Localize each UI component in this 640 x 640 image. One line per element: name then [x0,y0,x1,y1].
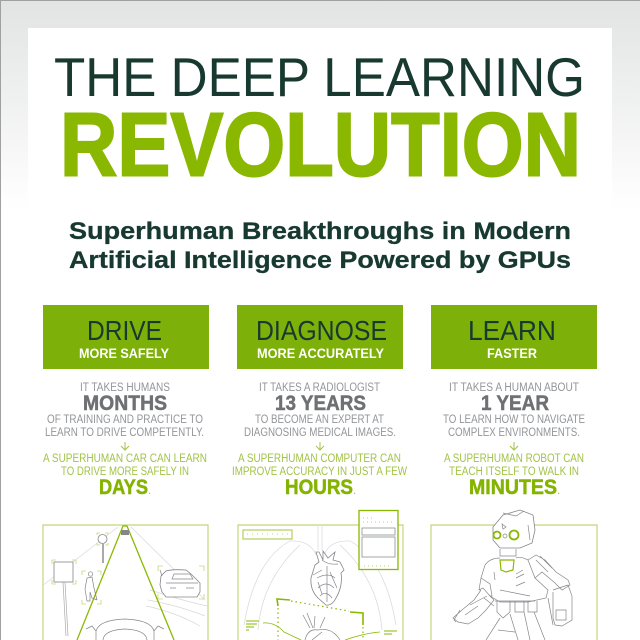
text: superhuman robot takes minutes: MINUTES [469,476,557,499]
robot right arm [528,555,572,626]
text: human takes 1 year: COMPLEX ENVIRONMENTS. [448,427,580,439]
car right [158,566,204,599]
callout left [246,621,259,630]
text: radiologist takes 13 years: DIAGNOSING MEDICAL IMAGES. [244,427,396,439]
illustration: self-driving car view [42,525,208,640]
heading: drive more safely: MORE SAFELY [79,345,170,361]
heading: learn faster: FASTER [487,345,537,361]
vision cone [77,526,174,640]
robot torso [481,557,548,602]
text: human takes 1 year [443,382,585,439]
text: human takes 1 year: TO LEARN HOW TO NAVIGATE [443,414,585,426]
text: superhuman computer takes hours: IMPROVE ACCURACY IN JUST A FEW [232,466,407,478]
text: superhuman robot takes minutes: TEACH ITSELF TO WALK IN [449,466,579,478]
text: humans take months: MONTHS [83,392,167,415]
small label box [243,530,292,539]
heading: drive more safely [43,305,209,369]
subtitle [69,218,571,274]
text: radiologist takes 13 years: 13 YEARS [275,392,366,415]
robot head [493,510,535,556]
robot chest badge [500,560,514,572]
text: humans take months [45,382,204,439]
text: superhuman robot takes minutes [444,453,584,499]
text: radiologist takes 13 years: TO BECOME AN EXPERT AT [255,414,384,426]
arrow: down [316,442,324,450]
text: humans take months: LEARN TO DRIVE COMPETENTLY. [45,427,204,439]
illustration: heart scan [238,510,403,640]
text: superhuman car takes days: A SUPERHUMAN CAR CAN LEARN [43,453,207,465]
lungs [244,525,396,630]
panel: learn [431,305,597,640]
text: humans take months: IT TAKES HUMANS [80,382,170,394]
text: humans take months: OF TRAINING AND PRACTICE TO [47,414,203,426]
round sign [97,533,108,563]
panel: diagnose [232,305,407,640]
road sign left [52,560,76,636]
heading: drive more safely: DRIVE [87,315,162,346]
title line: the deep learning: THE DEEP LEARNING [54,46,585,108]
heading: diagnose more accurately [237,305,403,369]
arrow: down [510,442,518,450]
heading: learn faster [431,305,597,369]
text: superhuman robot takes minutes: . [557,485,560,497]
illustration: robot [431,510,597,640]
text: radiologist takes 13 years [244,382,396,439]
title line: revolution: REVOLUTION [60,96,581,196]
camera [121,530,129,535]
heart detail [313,560,338,602]
scan bracket [277,599,363,640]
text: human takes 1 year: 1 YEAR [481,392,549,415]
text: superhuman computer takes hours: HOURS [285,476,353,499]
heading: diagnose more accurately: DIAGNOSE [256,315,387,346]
arrow: down [121,442,129,450]
heart lower [303,613,340,640]
robot hips and legs [486,598,553,640]
text: superhuman car takes days [43,453,207,499]
robot left arm [453,578,494,624]
heart top [311,551,344,605]
pedestrian [82,571,101,604]
callout right [384,631,397,634]
text: human takes 1 year: IT TAKES A HUMAN ABOUT [449,382,579,394]
text: superhuman robot takes minutes: A SUPERHUMAN ROBOT CAN [444,453,584,465]
text: superhuman car takes days: . [148,485,151,497]
scan report box [359,510,398,570]
subtitle: Artificial Intelligence Powered by GPUs [69,247,571,274]
text: superhuman car takes days: TO DRIVE MORE SAFELY IN [61,466,189,478]
text: superhuman computer takes hours: . [353,485,356,497]
heading: learn faster: LEARN [468,315,556,346]
text: radiologist takes 13 years: IT TAKES A RADIOLOGIST [259,382,380,394]
subtitle: Superhuman Breakthroughs in Modern [69,218,571,245]
text: superhuman computer takes hours [232,453,407,499]
ego car [86,619,164,640]
heading: diagnose more accurately: MORE ACCURATELY [257,345,385,361]
text: superhuman car takes days: DAYS [99,476,148,499]
text: superhuman computer takes hours: A SUPERHUMAN COMPUTER CAN [238,453,401,465]
title [54,46,585,196]
panel: drive [42,305,209,640]
